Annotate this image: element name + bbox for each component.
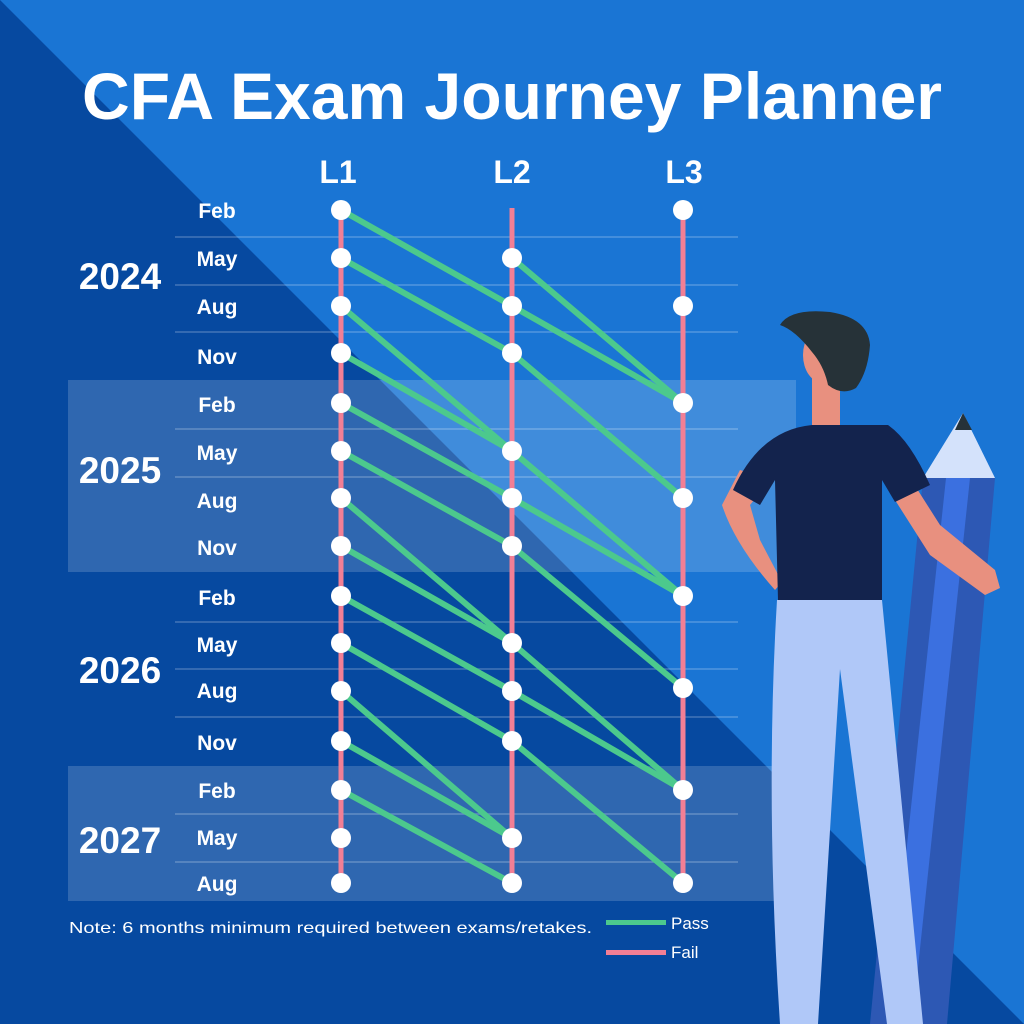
year labels: 2027 bbox=[79, 820, 161, 861]
month labels: Nov bbox=[197, 732, 237, 755]
column headers bbox=[319, 154, 703, 190]
month labels: Feb bbox=[198, 587, 236, 610]
month labels: May bbox=[197, 248, 238, 271]
legend bbox=[606, 914, 709, 962]
fail lines bbox=[341, 208, 683, 883]
illustration: person with pencil bbox=[722, 311, 1000, 1024]
month labels: May bbox=[197, 634, 238, 657]
year labels: 2026 bbox=[79, 650, 161, 691]
column headers: L1 bbox=[319, 154, 357, 190]
legend: Fail bbox=[671, 943, 698, 962]
year band 2025 bbox=[68, 380, 796, 572]
month labels: May bbox=[197, 442, 238, 465]
dots bbox=[331, 200, 693, 893]
month labels: Aug bbox=[197, 296, 237, 319]
column headers: L2 bbox=[493, 154, 531, 190]
month labels: Feb bbox=[198, 200, 236, 223]
month labels: Nov bbox=[197, 537, 237, 560]
month labels: Aug bbox=[197, 873, 237, 896]
column headers: L3 bbox=[665, 154, 703, 190]
legend: Pass bbox=[671, 914, 709, 933]
month labels: Feb bbox=[198, 780, 236, 803]
month labels: Aug bbox=[197, 680, 237, 703]
year labels: 2024 bbox=[79, 256, 162, 297]
month labels bbox=[197, 200, 238, 896]
month labels: Nov bbox=[197, 346, 237, 369]
month labels: Feb bbox=[198, 394, 236, 417]
year labels bbox=[79, 256, 162, 861]
month labels: May bbox=[197, 827, 238, 850]
year band 2027 bbox=[68, 766, 796, 901]
month labels: Aug bbox=[197, 490, 237, 513]
note: Note: 6 months minimum required between exams/retakes. bbox=[69, 920, 592, 937]
pass lines bbox=[341, 210, 683, 883]
title: CFA Exam Journey Planner bbox=[82, 59, 942, 133]
year labels: 2025 bbox=[79, 450, 161, 491]
